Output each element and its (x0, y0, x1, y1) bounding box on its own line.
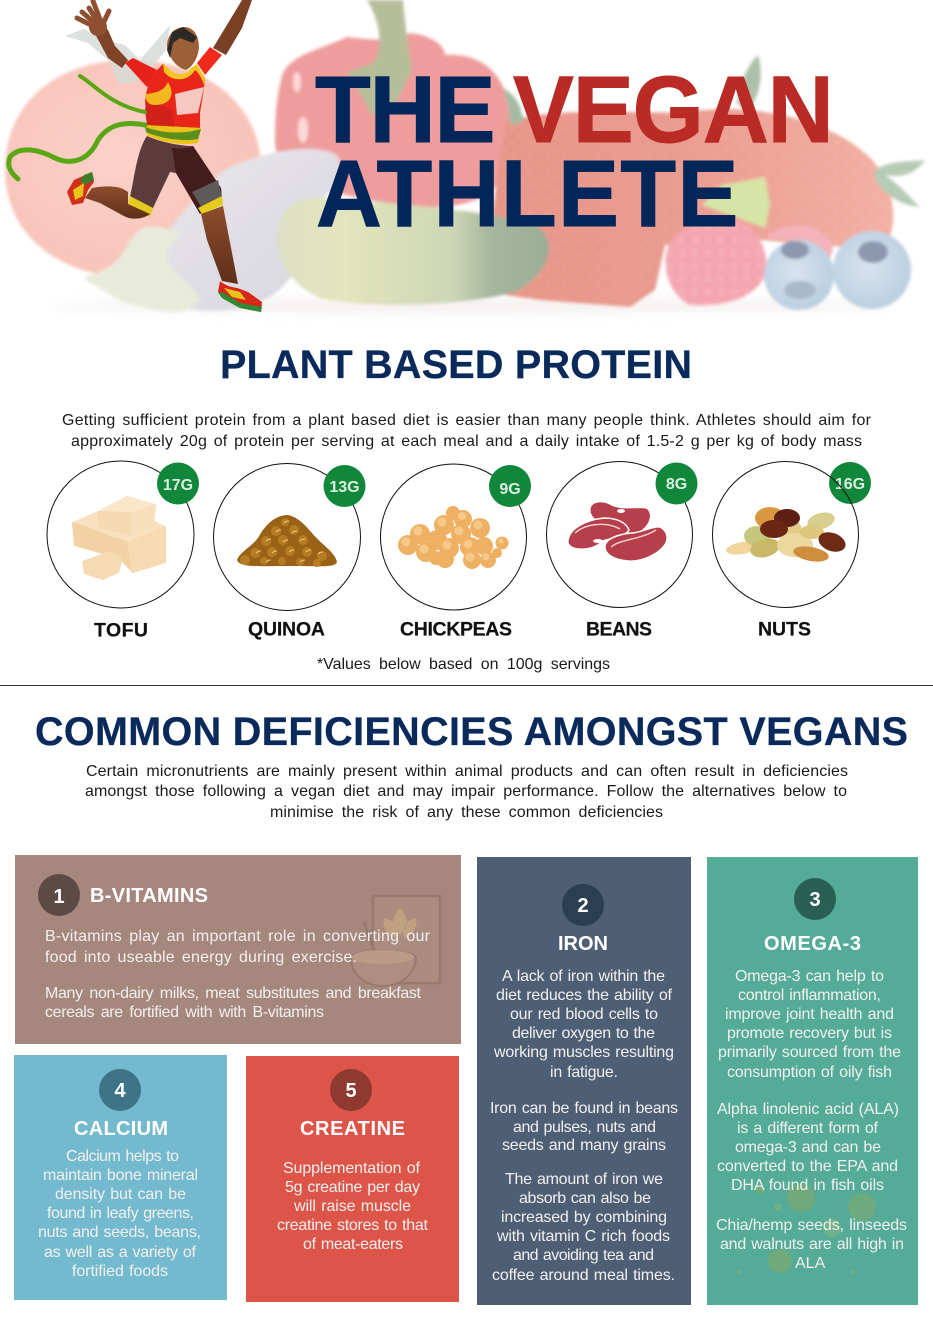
number badge 3: 3 (809, 889, 821, 911)
protein item: beans (546, 462, 698, 640)
panel 4 body text: density but can be (55, 1186, 186, 1203)
panel 2 body text: deliver oxygen to the (512, 1025, 655, 1042)
panel 3: omega-3 (707, 857, 918, 1305)
panel 1 body text: food into useable energy during exercise. (45, 949, 357, 966)
panel 2: iron (477, 857, 691, 1305)
protein item: nuts: NUTS (758, 618, 811, 640)
panel 2 body text: our red blood cells to (510, 1006, 658, 1023)
panel 3: omega-3: OMEGA-3 (764, 933, 861, 955)
panel 4: calcium: CALCIUM (74, 1118, 168, 1140)
panel 1 body text: B-vitamins play an important role in converting our (45, 928, 431, 945)
badge: 13G (324, 465, 366, 507)
panel 3 body text: is a different form of (737, 1120, 879, 1137)
panel 4 body text: as well as a variety of (44, 1244, 197, 1261)
number badge 2: 2 (577, 895, 589, 917)
panel 4 body text: nuts and seeds, beans, (38, 1224, 201, 1241)
panel 5 body text (277, 1160, 429, 1253)
panel 3 body text: Alpha linolenic acid (ALA) (717, 1101, 899, 1118)
protein intro text (62, 412, 872, 450)
icon: cereal box and bowl (351, 896, 440, 986)
number badge 5: 5 (345, 1080, 357, 1102)
protein item: tofu: TOFU (94, 620, 148, 642)
panel 3 body text: primarily sourced from the (718, 1044, 901, 1061)
panel 3 body text: control inflammation, (738, 987, 881, 1004)
panel 5 body text: creatine stores to that (277, 1217, 429, 1234)
title: ATHLETE (316, 140, 738, 246)
title: THE (315, 56, 495, 162)
badge: 9G: 9G (499, 481, 521, 498)
panel 3 body text: converted to the EPA and (717, 1158, 898, 1175)
panel 4 body text: Calcium helps to (66, 1148, 179, 1165)
panel 5 body text: of meat-eaters (303, 1236, 403, 1253)
panel 5 body text: 5g creatine per day (285, 1179, 420, 1196)
finish tape behind head (65, 25, 170, 84)
number badge 4 (99, 1069, 141, 1111)
panel 1 body text: Many non-dairy milks, meat substitutes and breakfast (45, 985, 422, 1002)
panel 3 body text: Omega-3 can help to (735, 968, 884, 985)
protein item: tofu (47, 461, 199, 642)
deficiencies intro text: Certain micronutrients are mainly present within animal products and can often result in deficiencies (86, 763, 848, 780)
panel 3 body text: Chia/hemp seeds, linseeds (716, 1217, 907, 1234)
title: VEGAN (513, 56, 834, 162)
deficiencies intro text: amongst those following a vegan diet and may impair performance. Follow the alternatives below to (85, 783, 847, 800)
panel 1: b-vitamins (15, 855, 461, 1044)
protein item: chickpeas: CHICKPEAS (400, 618, 512, 640)
panel 2 body text: and avoiding tea and (513, 1247, 654, 1264)
protein item: quinoa (214, 464, 366, 640)
panel 2 body text: increased by combining (501, 1209, 667, 1226)
panel 2 body text: absorb can also be (519, 1190, 651, 1207)
panel 5: creatine (246, 1056, 459, 1302)
badge: 8G (656, 462, 698, 504)
panel 3 body text: consumption of oily fish (727, 1064, 892, 1081)
badge: 13G: 13G (329, 479, 360, 496)
protein item: beans: BEANS (586, 618, 652, 640)
hero background: faded vegetables and fruit (5, 0, 925, 312)
panel 3 body text: improve joint health and (725, 1006, 894, 1023)
panel 2 body text: diet reduces the ability of (496, 987, 673, 1004)
panel 2 body text: coffee around meal times. (492, 1267, 675, 1284)
badge: 17G (157, 462, 199, 504)
footnote: *Values below based on 100g servings (317, 656, 610, 673)
icon: omega seed bubbles (737, 1184, 876, 1274)
panel 3 body text: and walnuts are all high in (720, 1236, 904, 1253)
panel 5: creatine: CREATINE (300, 1118, 405, 1140)
icon: kidney beans (568, 502, 667, 561)
number badge 1: 1 (53, 886, 65, 908)
protein item: nuts (712, 462, 871, 640)
deficiencies intro text (85, 763, 848, 821)
panel 2 body text: A lack of iron within the (502, 968, 665, 985)
badge: 17G: 17G (163, 477, 193, 494)
panel 2 body text: The amount of iron we (505, 1171, 663, 1188)
panel 2 body text: Iron can be found in beans (490, 1100, 678, 1117)
panel 1 body text: cereals are fortified with with B-vitamins (45, 1004, 324, 1021)
panel 3 body text: ALA (795, 1255, 826, 1272)
protein intro text: Getting sufficient protein from a plant based diet is easier than many people think. Athletes should aim for (62, 412, 872, 429)
panel 4 body text: fortified foods (72, 1263, 168, 1280)
heading: plant based protein: PLANT BASED PROTEIN (220, 343, 692, 387)
panel 3 body text: omega-3 and can be (735, 1139, 881, 1156)
heading: common deficiencies: COMMON DEFICIENCIES AMONGST VEGANS (35, 710, 908, 754)
panel 2 body text: with vitamin C rich foods (496, 1228, 670, 1245)
panel 4 body text (38, 1148, 201, 1280)
panel 1: b-vitamins: B-VITAMINS (90, 885, 208, 907)
number badge 2 (562, 884, 604, 926)
panel 3 body text: promote recovery but is (727, 1025, 892, 1042)
panel 2 body text: working muscles resulting (493, 1044, 674, 1061)
panel 2 body text: seeds and many grains (502, 1137, 666, 1154)
panel 5 body text: Supplementation of (283, 1160, 421, 1177)
protein intro text: approximately 20g of protein per serving at each meal and a daily intake of 1.5-2 g per kg of body mass (71, 433, 862, 450)
badge: 16G: 16G (835, 476, 865, 493)
panel 4: calcium (14, 1055, 227, 1300)
runner illustration (9, 0, 262, 312)
panel 3 body text: DHA found in fish oils (731, 1177, 884, 1194)
icon: tofu blocks (73, 497, 165, 579)
title (315, 56, 834, 246)
badge: 8G: 8G (666, 476, 687, 493)
panel 2: iron: IRON (558, 933, 608, 955)
badge: 9G (489, 465, 531, 507)
protein item: quinoa: QUINOA (248, 618, 325, 640)
panel 2 body text (490, 968, 678, 1284)
number badge 5 (330, 1069, 372, 1111)
panel 1 body text (45, 928, 431, 1021)
number badge 3 (794, 878, 836, 920)
icon: chickpeas (398, 506, 508, 569)
number badge 1 (38, 874, 80, 916)
panel 5 body text: will raise muscle (293, 1198, 411, 1215)
badge: 16G (829, 462, 871, 504)
panel 4 body text: maintain bone mineral (43, 1167, 198, 1184)
panel 4 body text: found in leafy greens, (47, 1205, 194, 1222)
panel 3 body text (716, 968, 907, 1272)
icon: quinoa pile (237, 515, 337, 567)
panel 2 body text: in fatigue. (550, 1064, 618, 1081)
icon: mixed nuts (725, 507, 848, 564)
finish tape (9, 76, 145, 179)
panel 2 body text: and pulses, nuts and (513, 1119, 656, 1136)
protein item: chickpeas (380, 464, 531, 640)
number badge 4: 4 (114, 1080, 126, 1102)
deficiencies intro text: minimise the risk of any these common deficiencies (270, 804, 663, 821)
